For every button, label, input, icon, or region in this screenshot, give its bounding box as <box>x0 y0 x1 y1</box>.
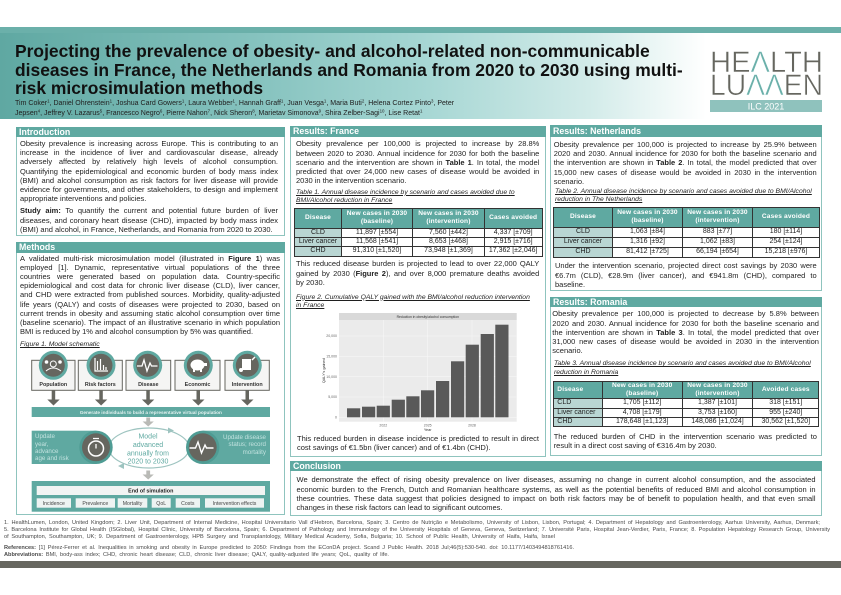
caption: table 1: BMI/Alcohol reduction in France <box>296 197 392 204</box>
heading: results Netherlands <box>550 124 822 137</box>
table 2: Disease <box>570 213 596 220</box>
table 2: 1,316 [±92] <box>630 238 665 245</box>
heading: results France: Results: France <box>293 126 359 136</box>
arrows: inputs to population <box>47 390 253 405</box>
text: conclusion body <box>296 475 816 512</box>
title: risk microsimulation methods <box>15 78 263 98</box>
table 3: Disease <box>557 386 583 393</box>
loop: update disease status: status; record <box>228 441 267 448</box>
table 1: New cases in 2030 <box>418 210 479 217</box>
table 2 <box>553 207 820 258</box>
table 2: 1,062 [±83] <box>700 238 735 245</box>
text: methods body: epidemiological and cost data for chronic liver disease (CLD), liver cancer, <box>20 281 280 290</box>
input box: intervention: Intervention <box>232 382 263 388</box>
text: Romania cost savings <box>554 432 817 450</box>
title: Projecting the prevalence of obesity- and alcohol-related non-communicable <box>15 41 650 61</box>
heading: conclusion <box>290 461 822 471</box>
text: Romania incidence: 2020 and 2030. Annual incidence for 2030 for both the baseline scenario and <box>552 319 819 328</box>
text: France incidence: predicted that over 24,000 new cases of disease would be avoided in <box>296 167 539 176</box>
text: methods body: (baseline scenario). The impact of an illustrative scenario in which population <box>20 318 280 327</box>
table 3: 318 [±151] <box>769 399 802 406</box>
text: Netherlands cost savings <box>555 261 817 289</box>
loop: update year: year, <box>35 441 49 448</box>
table 3: 4,708 [±179] <box>623 409 662 416</box>
input box: economic: Economic <box>185 382 210 388</box>
input box: disease <box>126 351 171 390</box>
top accent bar <box>0 27 841 33</box>
table 2: Liver cancer <box>564 238 602 245</box>
bar chart: cumulative QALY gained <box>326 313 517 428</box>
caption: table 1: Table 1. Annual disease incidence by scenario and cases avoided due to <box>296 189 515 196</box>
text: France incidence: scenario and the intervention are shown in Table 1. In total, the model <box>296 158 539 167</box>
text: France cost savings: This reduced burden in disease incidence is predicted to result in direct <box>297 434 539 443</box>
logo: HealthLumen ILC 2021: HEΛLTH <box>710 46 823 79</box>
loop: update year: Update <box>35 433 56 440</box>
block: end of simulation: Incidence <box>43 501 65 507</box>
text: France cost savings <box>297 434 539 452</box>
input box: intervention <box>225 351 269 390</box>
text: Romania incidence: 31,000 new cases of disease would be avoided in 2030 in the intervention <box>552 337 819 346</box>
text: Romania cost savings: The reduced burden of CHD in the intervention scenario was predicted to <box>554 432 817 441</box>
text: Netherlands cost savings: €6.7m (CLD), €28.9m (liver cancer), and €941.8m (CHD), compared to <box>555 271 817 280</box>
text: France incidence: 2030 in the intervention scenario. <box>296 176 406 185</box>
input box: disease: Disease <box>138 382 158 388</box>
table 3: 3,753 [±160] <box>698 409 737 416</box>
text: Romania incidence: scenario. <box>552 346 583 355</box>
text: conclusion body: changes in these risk factors can lead to significant outcomes. <box>296 503 502 512</box>
loop: model advanced annually: annually from <box>127 450 169 457</box>
block: end of simulation: Intervention effects <box>213 501 257 507</box>
heading: results Romania: Results: Romania <box>553 297 627 307</box>
text: Netherlands cost savings: baseline. <box>555 280 585 289</box>
block: end of simulation <box>32 481 270 512</box>
logo: HealthLumen ILC 2021 <box>710 46 823 112</box>
text: France cost savings: cost savings of €1.5bn (liver cancer) and of €1.4bn (CHD). <box>297 443 490 452</box>
loop: model advanced annually: Model <box>138 433 158 440</box>
authors: Tim Coker1, Daniel Ohrenstein1, Joshua Card Gowers1, Laura Webber1, Hannah Graff1, Juan Vesga1, Maria Buti2, Helena Cortez Pinto3, Peter <box>15 98 454 107</box>
text: Romania incidence: the intervention are shown in Table 3. In total, the model predicted that over <box>552 328 819 337</box>
chart axes labels: 2025 <box>424 424 432 428</box>
logo: HealthLumen ILC 2021: LUΛΛEN <box>710 69 823 102</box>
chart axes labels: 20,000 <box>326 334 337 338</box>
text: introduction body: Obesity prevalence is increasing across Europe. This is contributing to an <box>20 139 278 148</box>
table 2: 883 [±77] <box>703 228 732 235</box>
table 1: Disease <box>305 214 331 221</box>
banner: generate individuals <box>32 407 270 417</box>
text: methods body: and CHD were extracted from published sources. Morbidity, quality-adjusted <box>20 290 280 299</box>
footer: references and abbreviations: References: [1] Pérez-Ferrer et al. Inequalities in smoking and obesity in Europe predicted to 2050: Findings from the EConDA project. Scand J Public Health. 2018 Jul;46(5):530-540. doi: 10.1177/1403494818761416. <box>4 545 574 551</box>
text: study aim: Study aim: To quantify the current and potential future burden of liver <box>20 206 278 215</box>
panel: results Netherlands <box>550 124 822 290</box>
header band <box>0 27 841 119</box>
loop: model advanced annually: 2020 to 2030 <box>128 458 169 465</box>
table 2: 254 [±124] <box>769 238 802 245</box>
table 3: 1,705 [±112] <box>623 399 661 406</box>
chart axes labels: 10,000 <box>326 375 337 379</box>
text: France QALY: by 2030. <box>296 278 325 287</box>
table 3 <box>553 381 819 427</box>
input box: economic <box>175 351 220 390</box>
table 1: 11,897 [±554] <box>356 229 398 236</box>
text: Romania incidence <box>552 309 819 355</box>
figure 1: model schematic <box>31 350 270 512</box>
table 3: (intervention) <box>695 390 740 397</box>
block: end of simulation: QoL <box>156 501 166 507</box>
caption: figure 1: Figure 1. Model schematic <box>20 341 100 348</box>
chart axes labels: 0 <box>335 416 337 420</box>
arrow: loop to end of simulation <box>143 470 154 479</box>
table 2: Cases avoided <box>762 213 810 220</box>
block: end of simulation: Prevalence <box>82 501 108 507</box>
caption: table 3: Table 3. Annual disease incidence by scenario and cases avoided due to BMI/Alcohol <box>554 360 811 367</box>
table 1: 17,362 [±2,046] <box>489 247 537 254</box>
text: conclusion body: We demonstrate the effect of rising obesity prevalence on liver diseases, assuming no change in current alcohol consumption, and the associated <box>296 475 816 484</box>
table 1: 4,337 [±709] <box>494 229 533 236</box>
table 1: New cases in 2030 <box>347 210 407 217</box>
table 1: 7,560 [±442] <box>429 229 468 236</box>
table 3: 178,648 [±1,123] <box>616 418 668 425</box>
title <box>15 41 683 98</box>
text: introduction body: (BMI) and alcohol consumption as risk factors for liver disease will provide <box>20 176 278 185</box>
caption: figure 2: Figure 2. Cumulative QALY gained with the BMI/alcohol reduction intervention <box>296 294 530 300</box>
table 2: 81,412 [±725] <box>626 248 669 255</box>
text: study aim: diseases, and coronary heart disease (CHD), impacted by body mass index <box>20 216 278 225</box>
heading: methods <box>16 242 285 253</box>
chart axes labels <box>326 334 476 428</box>
heading: results France <box>290 126 546 136</box>
chart axis titles: Year <box>424 428 432 432</box>
panel: introduction <box>16 126 285 236</box>
text: methods body: A validated multi-risk microsimulation model (illustrated in Figure 1) was <box>20 254 280 263</box>
table 1: 8,653 [±468] <box>429 238 468 245</box>
title: diseases in France, the Netherlands and Romania from 2020 to 2030 using multi- <box>15 60 683 80</box>
text: Netherlands incidence: Obesity prevalence per 100,000 is projected to increase by 25.9% between <box>554 140 817 149</box>
table 3: 1,387 [±101] <box>698 399 737 406</box>
input box: risk factors <box>78 351 122 390</box>
table 1: 2,915 [±716] <box>494 238 533 245</box>
text: Netherlands incidence: 2020 and 2030. Annual incidence for 2030 for both the baseline scenario and <box>554 149 817 158</box>
authors <box>15 98 454 117</box>
loop: model advanced annually: advanced <box>133 442 163 449</box>
loop: update disease status <box>186 431 270 464</box>
text: France incidence: Obesity prevalence per 100,000 is projected to increase by 28.8% <box>296 139 539 148</box>
table 2: New cases in 2030 <box>617 209 678 216</box>
text: France incidence: between 2020 to 2030. Annual incidence for 2030 for both the baseline <box>296 149 539 158</box>
text: introduction body: evidence for governments, and other stakeholders, to design and implement <box>20 185 278 194</box>
table 3: (baseline) <box>626 390 658 397</box>
text: Netherlands incidence: the intervention are shown in Table 2. In total, the model predicted that over <box>554 158 817 167</box>
table 2: New cases in 2030 <box>687 209 748 216</box>
chart axes labels: 15,000 <box>326 354 337 358</box>
text: conclusion body: these countries. These data suggest that policies designed to impact on both risk factors may be of benefit to population health, and that even small <box>296 494 816 503</box>
text: France incidence <box>296 139 539 185</box>
logo: HealthLumen ILC 2021: ILC 2021 <box>748 101 784 111</box>
loop: update disease status: Update disease <box>223 434 267 441</box>
table 3: New cases in 2030 <box>612 382 672 389</box>
table 2: CLD <box>576 228 590 235</box>
panel: results France <box>290 126 546 457</box>
text: France QALY <box>296 259 539 287</box>
block: end of simulation: End of simulation <box>128 488 173 494</box>
chart axes labels: 2028 <box>468 424 476 428</box>
text: France QALY: This reduced disease burden is projected to lead to over 22,000 QALY <box>296 259 539 268</box>
text: Romania incidence: Obesity prevalence per 100,000 is projected to decrease by 5.8% between <box>552 309 819 318</box>
loop: update year <box>32 431 113 464</box>
table 2: 66,194 [±654] <box>696 248 739 255</box>
heading: introduction: Introduction <box>19 126 70 136</box>
caption: table 1 <box>296 189 515 204</box>
chart axes labels: 5,000 <box>328 395 337 399</box>
table 2: (intervention) <box>695 217 740 224</box>
table 3: 30,562 [±1,520] <box>761 418 810 425</box>
caption: table 2: Table 2. Annual disease incidence by scenario and cases avoided due to BMI/Alcohol <box>555 188 812 195</box>
text: Netherlands incidence: scenario. <box>554 177 584 186</box>
input box: risk factors: Risk factors <box>85 382 116 388</box>
table 1: Cases avoided <box>489 214 537 221</box>
loop: update year: advance <box>35 448 59 455</box>
table 2: CHD <box>575 248 591 255</box>
text: methods body: life years (QALY) and costs of diseases were projected to 2030, based on <box>20 300 280 309</box>
footer: references and abbreviations <box>4 545 574 558</box>
table 1: (intervention) <box>426 218 471 225</box>
panel: results Romania <box>550 297 822 456</box>
table 3: Avoided cases <box>762 386 810 393</box>
text: Netherlands incidence: 15,000 new cases of disease would be avoided in 2030 in the intervention <box>554 168 817 177</box>
text: France QALY: gained by 2030 (Figure 2), and over 8,000 premature deaths avoided <box>296 269 539 278</box>
table 1: 11,568 [±541] <box>356 238 398 245</box>
footer: affiliations <box>4 520 830 540</box>
table 1: 91,310 [±1,520] <box>353 247 401 254</box>
table 1: CHD <box>310 247 326 254</box>
caption: figure 2 <box>296 294 530 309</box>
footer: affiliations: 1. HealthLumen, London, United Kingdom; 2. Liver Unit, Department of Internal Medicine, Hospital Universitario Vall d'Hebron, Barcelona, Spain; 3. Centro de Nutrição e Metabolismo, University of Lisbon, Lisbon, Portugal; 4. Department of Hepatology and Gastroenterology, Aarhus University, Aarhus, Denmark; <box>4 520 820 526</box>
block: end of simulation: Mortality <box>123 501 143 507</box>
chart axis titles <box>322 358 432 432</box>
caption: table 3: reduction in Romania <box>554 369 618 376</box>
footer: affiliations: 5. Barcelona Institute for Global Health (ISGlobal), Hospital Clínic, University of Barcelona, Spain; 6. Department of Pathology and Immunology of the University Hospitals of Geneva, Geneva, Switzerland; 7. Université Paris, Hospital Jean-Verdier, Paris, France; 8. Population Hepatology Research Group, University <box>4 527 830 533</box>
bars <box>347 325 508 417</box>
heading: conclusion: Conclusion <box>293 461 341 471</box>
text: Netherlands cost savings: Under the intervention scenario, projected direct cost savings by 2030 were <box>555 261 817 270</box>
heading: methods: Methods <box>19 242 55 252</box>
panel: methods <box>16 242 285 515</box>
banner: generate individuals: Generate individuals to build a representative virtual population <box>80 410 222 415</box>
text: Romania cost savings: result in a direct cost saving of €316.4m by 2030. <box>554 441 717 450</box>
block: end of simulation: Costs <box>181 501 195 507</box>
text: methods body: employed [1]. Dynamic, representative virtual populations of the three <box>20 263 280 272</box>
heading: results Netherlands: Results: Netherlands <box>553 126 641 136</box>
text: introduction body <box>20 139 278 203</box>
loop: model advanced annually <box>109 427 189 469</box>
chart axes labels: 2022 <box>379 424 387 428</box>
table 2: 15,218 [±976] <box>765 248 807 255</box>
table 1 <box>294 208 543 257</box>
text: introduction body: appropriate interventions and policies. <box>20 194 146 203</box>
text: conclusion body: economic burden to the French, Dutch and Romanian healthcare systems, as well as the potential benefits of reduced BMI and alcohol consumption in <box>296 485 816 494</box>
input box: population: Population <box>39 382 67 388</box>
bottom bar <box>0 561 841 568</box>
text: study aim <box>20 206 278 234</box>
text: Netherlands incidence <box>554 140 817 186</box>
loop: update year: age and risk <box>35 455 70 462</box>
chart strip title: Reduction in obesity/alcohol consumption <box>397 315 459 319</box>
table 3: New cases in 2030 <box>687 382 748 389</box>
footer: references and abbreviations: Abbreviations: BMI, body-ass index; CHD, chronic heart disease; CLD, chronic liver disease; QALY, quality-adjusted life years; QoL, quality of life. <box>4 552 389 558</box>
text: methods body: current trends in obesity and assuming static alcohol consumption over time <box>20 309 280 318</box>
table 3: CLD <box>557 399 571 406</box>
heading: introduction <box>16 126 285 137</box>
panel: conclusion <box>290 461 822 516</box>
authors: Jepsen4, Jeffrey V. Lazarus5, Francesco Negro6, Pierre Nahon7, Nick Sheron8, Marietav Simonova9, Shira Zelber-Sagi10, Lise Retat1 <box>15 108 422 117</box>
text: methods body: BMI is reduced by 1% and alcohol consumption by 5% was quantified. <box>20 327 253 336</box>
text: introduction body: Quantifying the epidemiological and economic burden of body mass index <box>20 167 278 176</box>
table 1: (baseline) <box>361 218 393 225</box>
input box: population <box>32 351 75 390</box>
arrow: banner to model loop <box>143 417 154 426</box>
caption: table 2: reduction in The Netherlands <box>555 196 642 203</box>
table 3: Liver cancer <box>557 409 595 416</box>
table 3: 955 [±240] <box>769 409 802 416</box>
table 1: Liver cancer <box>299 238 337 245</box>
chart axis titles: QALY's gained <box>322 358 326 383</box>
table 2: 1,063 [±84] <box>630 228 665 235</box>
caption: table 2 <box>555 188 812 203</box>
text: introduction body: adversely affected by relatively high levels of alcohol consumption. <box>20 157 278 166</box>
table 3: 148,086 [±1,024] <box>691 418 744 425</box>
caption: table 3 <box>554 360 811 376</box>
text: methods body: countries were generated based on population data. Country-specific <box>20 272 280 281</box>
text: study aim: (BMI) and alcohol, in France, Netherlands, and Romania from 2020 to 2030. <box>20 225 273 234</box>
table 2: (baseline) <box>631 217 664 224</box>
caption: figure 2: in France <box>296 302 324 309</box>
table 1: CLD <box>311 229 325 236</box>
text: methods body <box>20 254 280 336</box>
loop: update disease status: mortality <box>243 449 267 456</box>
table 3: CHD <box>557 418 572 425</box>
heading: results Romania <box>550 297 822 307</box>
text: introduction body: increase in the incidence of liver and cardiovascular disease, already <box>20 148 278 157</box>
table 2: 180 [±114] <box>770 228 802 235</box>
table 1: 73,948 [±1,369] <box>424 247 473 254</box>
footer: affiliations: of Southampton, Southampton, UK; 9. Department of Gastroenterology, HPB Surgery and Transplantology, Military Medical Academy, Sofia, Bulgaria; 10. School of Public Health, University of Haifa, Haifa, Israel <box>4 534 555 540</box>
